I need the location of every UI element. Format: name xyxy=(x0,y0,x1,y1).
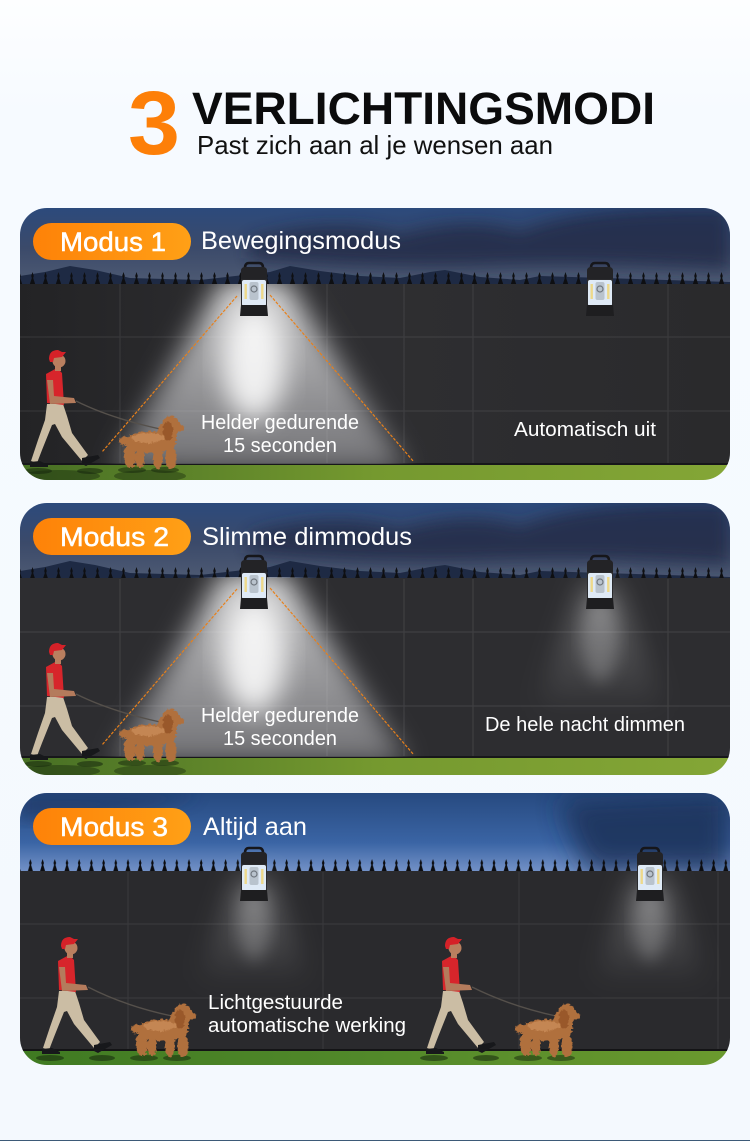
lamp dimmed xyxy=(586,556,614,609)
label: mode name: Slimme dimmodus xyxy=(202,523,412,551)
dim light right xyxy=(604,866,696,974)
dog right xyxy=(514,1004,580,1061)
dim light cone xyxy=(548,574,652,698)
lamp off xyxy=(586,263,614,316)
badge: modus 2 xyxy=(33,518,191,555)
dim light left xyxy=(208,867,300,974)
person left xyxy=(36,937,115,1061)
lamp right xyxy=(636,848,664,901)
dog left xyxy=(130,1004,196,1061)
big orange 3: 3 xyxy=(128,74,180,174)
leash right xyxy=(472,987,556,1016)
person walking xyxy=(24,350,103,474)
badge: modus 3 xyxy=(33,808,191,845)
leash xyxy=(76,694,160,722)
badge: modus 3: Modus 3 xyxy=(60,812,168,842)
badge: modus 1 xyxy=(33,223,191,260)
caption: bright: 15 seconden xyxy=(223,727,337,750)
light cone xyxy=(112,280,408,470)
caption: bright: Helder gedurende xyxy=(201,704,359,727)
title block xyxy=(128,74,655,174)
dog xyxy=(118,709,184,766)
leash xyxy=(76,401,160,429)
caption: off: Automatisch uit xyxy=(514,419,656,441)
caption: dim: De hele nacht dimmen xyxy=(485,714,685,736)
lamp lit xyxy=(240,556,268,609)
caption: bright: Helder gedurende xyxy=(201,411,359,434)
motion range lines xyxy=(102,588,414,755)
label: mode name: Bewegingsmodus xyxy=(201,227,401,255)
label: mode name: Altijd aan xyxy=(203,813,307,841)
lamp left xyxy=(240,848,268,901)
dog xyxy=(118,416,184,473)
caption: light controlled xyxy=(208,991,406,1037)
scene background xyxy=(20,503,730,777)
caption: light controlled: Lichtgestuurde xyxy=(208,991,343,1014)
panel: modus 3 xyxy=(20,793,730,1065)
scene background xyxy=(20,793,730,1065)
subtitle: Past zich aan al je wensen aan xyxy=(197,130,553,160)
badge: modus 1: Modus 1 xyxy=(60,227,166,257)
lamp lit xyxy=(240,263,268,316)
heading: VERLICHTINGSMODI xyxy=(192,83,655,134)
panel: modus 2 xyxy=(20,503,730,777)
caption: bright xyxy=(201,411,359,457)
person right xyxy=(420,937,499,1061)
caption: bright: 15 seconden xyxy=(223,434,337,457)
caption: bright xyxy=(201,704,359,750)
motion range lines xyxy=(102,295,414,462)
person walking xyxy=(24,643,103,767)
light cone xyxy=(112,573,408,763)
caption: light controlled: automatische werking xyxy=(208,1014,406,1037)
scene background xyxy=(20,208,730,482)
badge: modus 2: Modus 2 xyxy=(60,522,169,552)
panel: modus 1 xyxy=(20,208,730,482)
leash left xyxy=(88,987,172,1016)
